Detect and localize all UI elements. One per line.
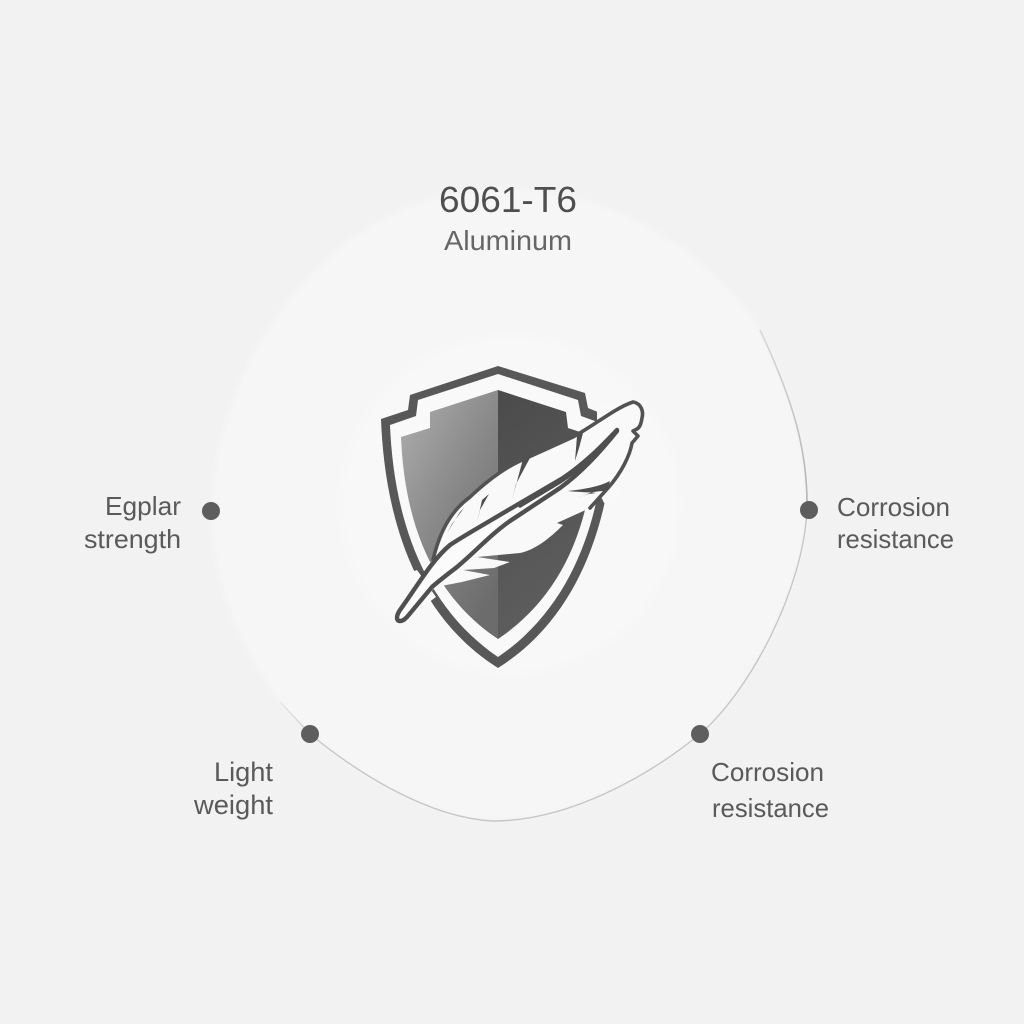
label: bottom left: weight	[193, 790, 274, 820]
feather quill and rachis	[397, 430, 617, 621]
icon: shield with feather	[381, 366, 643, 668]
shield left facet	[401, 390, 498, 639]
label: bottom right	[711, 757, 829, 823]
inner halo circle	[332, 327, 688, 683]
label: left: Egplar	[105, 491, 181, 521]
shield right facet	[498, 390, 595, 639]
label: bottom left: Light	[214, 757, 273, 787]
shield white band	[390, 374, 606, 657]
label: bottom left	[193, 757, 274, 820]
node: right dot	[800, 501, 818, 519]
feather barbs	[447, 433, 610, 533]
disc edge line: faded tail	[280, 702, 310, 734]
label: right: Corrosion	[837, 492, 950, 522]
label: right: resistance	[837, 524, 954, 554]
panel: central organic disc	[211, 188, 807, 821]
title	[439, 179, 577, 256]
label: right	[837, 492, 954, 554]
shield outer outline	[381, 366, 615, 668]
gaps cut into shield outline around feather	[406, 405, 630, 606]
node: bottom right dot	[691, 725, 709, 743]
label: left	[84, 491, 181, 554]
label: left: strength	[84, 524, 181, 554]
disc edge line: lower	[310, 510, 807, 821]
disc edge line: right	[760, 330, 807, 510]
node: bottom left dot	[301, 725, 319, 743]
title: Aluminum	[444, 225, 572, 256]
label: bottom right: Corrosion	[711, 757, 824, 787]
feather rachis fill near tip	[520, 430, 617, 506]
feather vane	[398, 402, 643, 621]
node: left dot	[202, 502, 220, 520]
title: 6061-T6	[439, 179, 577, 220]
feather outline: upper and right edge	[433, 402, 643, 560]
label: bottom right: resistance	[712, 793, 829, 823]
